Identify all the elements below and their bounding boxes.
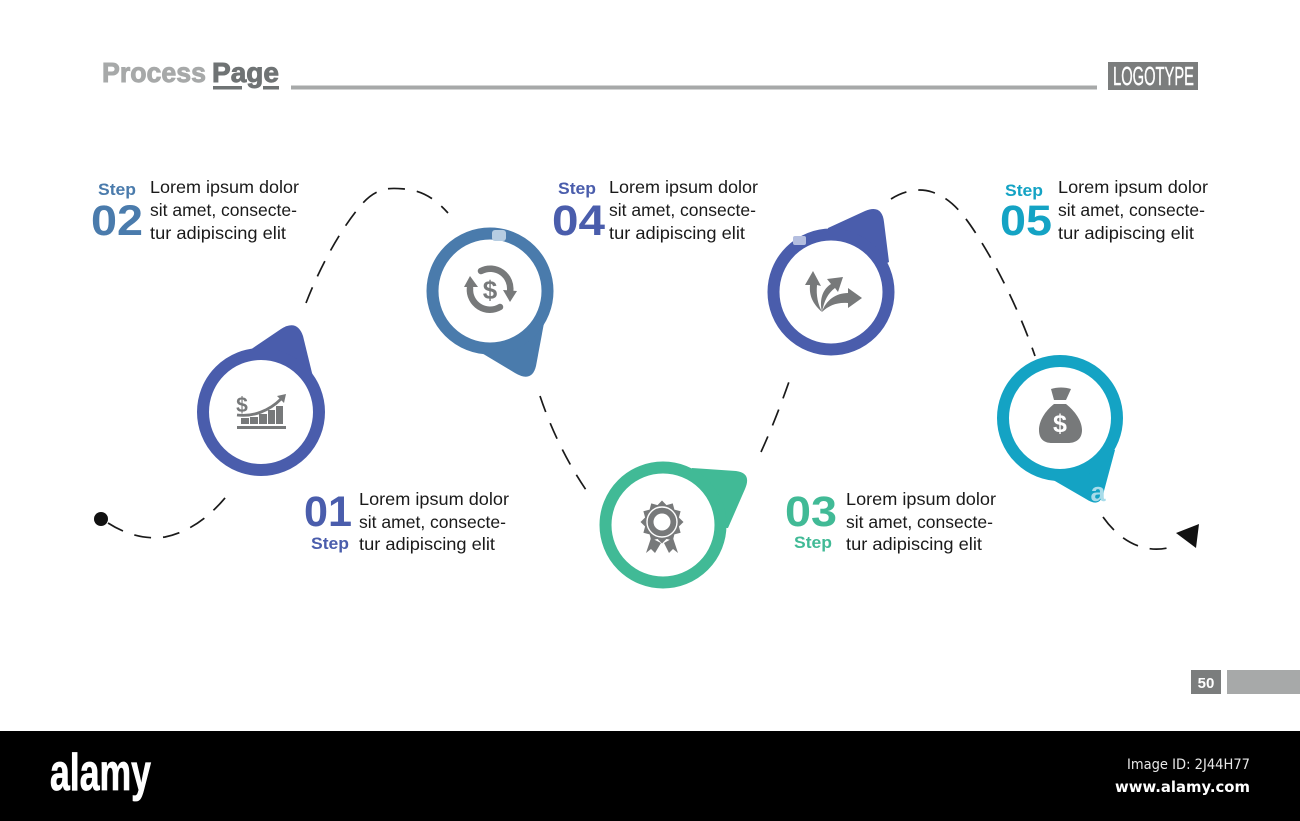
title: Process	[102, 57, 206, 88]
watermark letter: a	[1090, 477, 1106, 507]
step 5 text	[1058, 177, 1208, 243]
step 5 marker	[1003, 361, 1117, 507]
dashed route line	[108, 188, 1175, 549]
icon: diverging arrows	[805, 271, 862, 312]
stock image band	[0, 731, 1300, 821]
step 4 text: Lorem ipsum dolor	[609, 177, 758, 197]
step 4 label: Step	[558, 179, 596, 198]
step 3 text	[846, 489, 996, 554]
page number	[1191, 670, 1221, 694]
route end arrowhead	[1176, 524, 1199, 548]
step 1 text: tur adipiscing elit	[359, 534, 495, 554]
logotype badge: LOGOTYPE	[1113, 61, 1194, 91]
footer grey bar	[1227, 670, 1300, 694]
step 3 label: Step	[794, 533, 832, 552]
alamy url: www.alamy.com	[1115, 778, 1250, 796]
title	[102, 57, 279, 90]
icon: money cycle	[464, 269, 517, 310]
icon: rising chart with dollar: $	[236, 394, 248, 417]
step 4 label	[552, 177, 758, 245]
step 4 text: sit amet, consecte-	[609, 200, 756, 220]
alamy logo: alamy	[50, 744, 151, 802]
step 1 marker	[203, 325, 319, 470]
watermark fleck	[793, 236, 806, 245]
step 5 text: tur adipiscing elit	[1058, 223, 1194, 243]
step 2 text	[150, 177, 299, 243]
logotype badge	[1108, 61, 1198, 91]
step 3 text: tur adipiscing elit	[846, 534, 982, 554]
step 5 text: sit amet, consecte-	[1058, 200, 1205, 220]
route start dot	[94, 512, 108, 526]
icon: money bag	[1039, 388, 1082, 443]
icon: award rosette	[640, 500, 684, 553]
step 3 label	[785, 488, 996, 554]
step 3 marker	[606, 468, 747, 582]
step 2 label: 02	[91, 197, 143, 245]
icon: rising chart with dollar	[236, 394, 286, 429]
step 1 label: Step	[311, 534, 349, 553]
step 5 label: Step	[1005, 181, 1043, 200]
step 2 label	[91, 177, 299, 245]
step 4 label: 04	[552, 197, 605, 245]
step 3 text: sit amet, consecte-	[846, 512, 993, 532]
step 1 label: 01	[304, 488, 352, 536]
watermark fleck	[492, 230, 506, 241]
step 1 text	[359, 489, 509, 554]
image id: Image ID: 2J44H77	[1127, 757, 1250, 773]
step 4 text	[609, 177, 758, 243]
page number: 50	[1198, 675, 1214, 692]
step 3 text: Lorem ipsum dolor	[846, 489, 996, 509]
icon: money bag: $	[1053, 410, 1067, 438]
step 2 label: Step	[98, 180, 136, 199]
title: Page	[212, 57, 279, 88]
step 5 label: 05	[1000, 197, 1052, 245]
step 5 text: Lorem ipsum dolor	[1058, 177, 1208, 197]
step 1 text: Lorem ipsum dolor	[359, 489, 509, 509]
step 5 label	[1000, 177, 1208, 245]
step 2 text: tur adipiscing elit	[150, 223, 286, 243]
icon: money cycle: $	[483, 275, 498, 305]
step 3 label: 03	[785, 488, 837, 536]
step 4 marker	[774, 209, 889, 350]
step 1 label	[304, 488, 509, 554]
step 2 text: Lorem ipsum dolor	[150, 177, 299, 197]
step 1 text: sit amet, consecte-	[359, 512, 506, 532]
header rule	[291, 86, 1097, 90]
step 4 text: tur adipiscing elit	[609, 223, 745, 243]
step 2 text: sit amet, consecte-	[150, 200, 297, 220]
step 2 marker	[432, 230, 548, 377]
